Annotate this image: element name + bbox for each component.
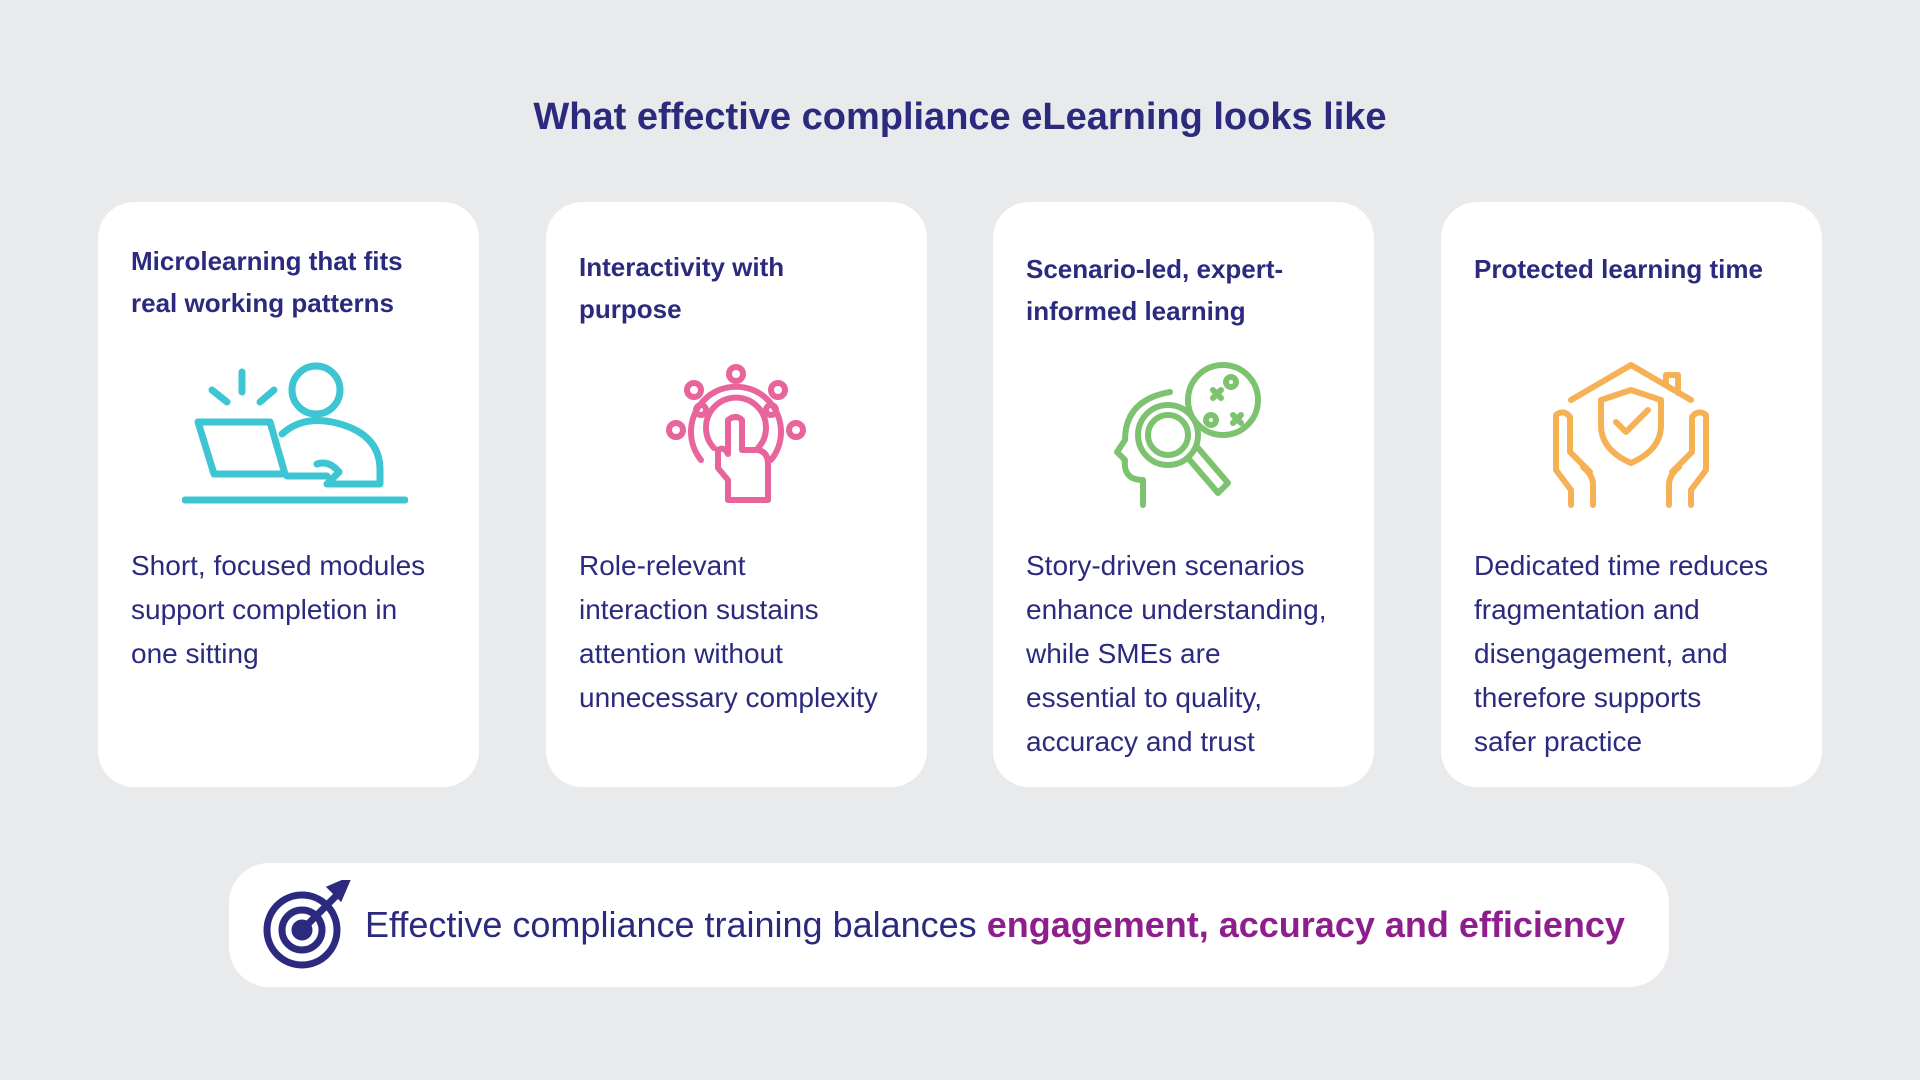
body: microlearning: support completion in xyxy=(131,594,397,625)
title: What effective compliance eLearning looks like xyxy=(533,96,1387,138)
body: microlearning: one sitting xyxy=(131,638,259,669)
panel: microlearning xyxy=(98,202,479,787)
heading: microlearning: Microlearning that fits xyxy=(131,246,403,276)
heading: interactivity xyxy=(579,252,784,324)
body: interactivity: unnecessary complexity xyxy=(579,682,878,713)
body: interactivity: attention without xyxy=(579,638,783,669)
body: interactivity xyxy=(579,550,878,713)
heading: microlearning: real working patterns xyxy=(131,288,394,318)
body: protected time: Dedicated time reduces xyxy=(1474,550,1768,581)
body: scenario-led: essential to quality, xyxy=(1026,682,1262,713)
icon: touch hand xyxy=(666,364,806,503)
body: scenario-led: while SMEs are xyxy=(1026,638,1221,669)
body: protected time: therefore supports xyxy=(1474,682,1701,713)
icon: head with magnifier xyxy=(1114,362,1261,508)
body: scenario-led xyxy=(1026,550,1326,757)
body: interactivity: Role-relevant xyxy=(579,550,746,581)
panel: interactivity xyxy=(546,202,927,787)
body: protected time xyxy=(1474,550,1768,757)
body: microlearning: Short, focused modules xyxy=(131,550,425,581)
panel: protected time xyxy=(1441,202,1822,787)
banner: summary xyxy=(229,863,1669,987)
panel: scenario-led xyxy=(993,202,1374,787)
icon: hands with shield xyxy=(1553,362,1709,508)
body: protected time: disengagement, and xyxy=(1474,638,1728,669)
heading: scenario-led: Scenario-led, expert- xyxy=(1026,254,1283,284)
icon: target xyxy=(264,880,351,968)
body: protected time: fragmentation and xyxy=(1474,594,1700,625)
body: protected time: safer practice xyxy=(1474,726,1642,757)
heading: interactivity: Interactivity with xyxy=(579,252,784,282)
heading: microlearning xyxy=(131,246,403,318)
heading: scenario-led: informed learning xyxy=(1026,296,1246,326)
body: scenario-led: accuracy and trust xyxy=(1026,726,1255,757)
heading: scenario-led xyxy=(1026,254,1283,326)
body: microlearning xyxy=(131,550,425,669)
body: scenario-led: enhance understanding, xyxy=(1026,594,1326,625)
body: scenario-led: Story-driven scenarios xyxy=(1026,550,1305,581)
heading: protected time: Protected learning time xyxy=(1474,254,1763,284)
heading: interactivity: purpose xyxy=(579,294,682,324)
body: interactivity: interaction sustains xyxy=(579,594,819,625)
text: summary: Effective compliance training balances engagement, accuracy and efficiency xyxy=(365,904,1625,945)
icon: person at laptop xyxy=(182,362,408,504)
